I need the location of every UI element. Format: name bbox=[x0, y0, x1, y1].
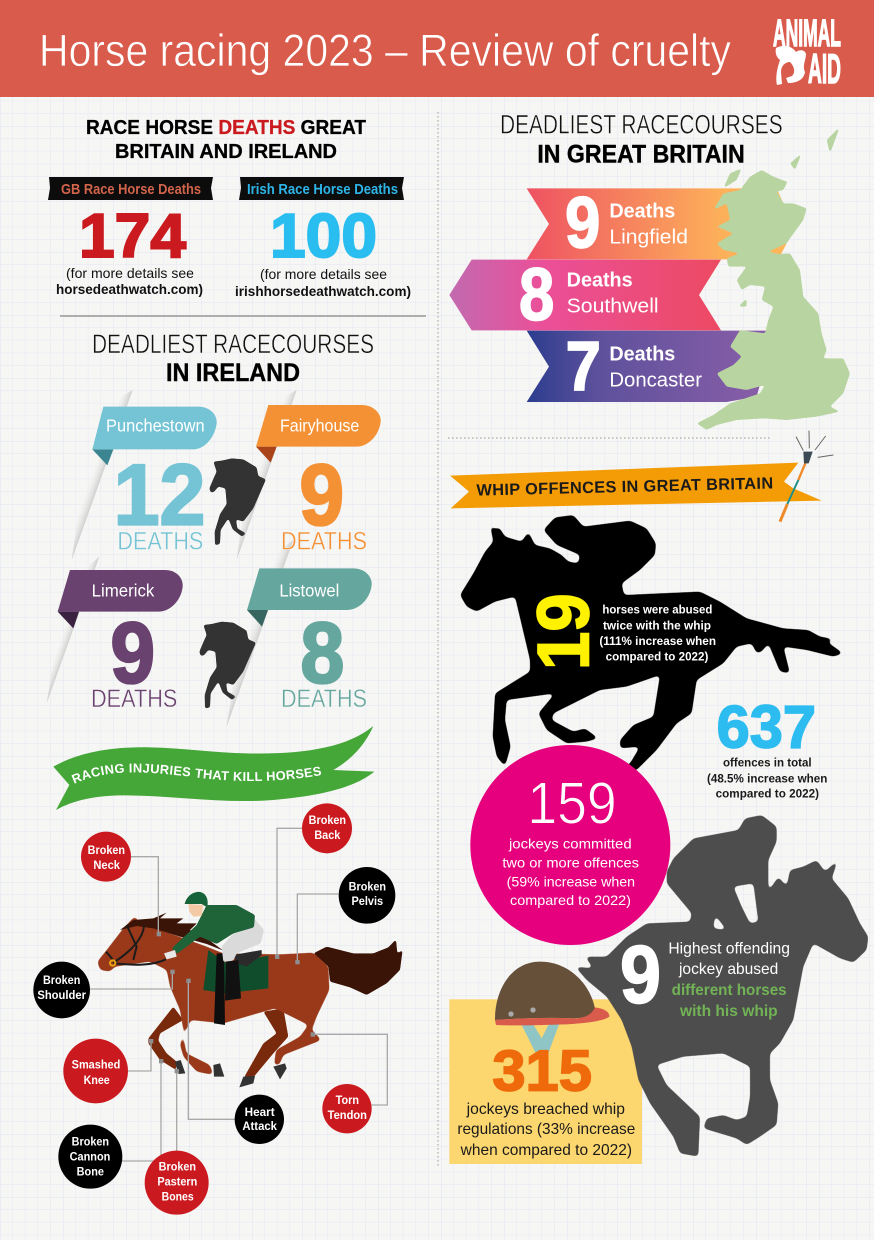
badge: heart attack: Heart bbox=[245, 1105, 275, 1119]
heading: Great Britain bbox=[500, 109, 783, 168]
text: horses abused: (111% increase when bbox=[599, 634, 716, 648]
badge: broken neck: Neck bbox=[93, 858, 120, 872]
horizontal dotted divider bbox=[448, 437, 770, 439]
text: horses abused: twice with the whip bbox=[603, 618, 711, 632]
panel: racing injuries diagram bbox=[33, 803, 403, 1215]
circle: 159 jockeys: (59% increase when bbox=[507, 874, 635, 890]
ribbon: Fairyhouse bbox=[256, 405, 381, 463]
panel: whip offences bbox=[450, 431, 843, 800]
ribbon: Lingfield bbox=[527, 184, 787, 264]
text: horses abused bbox=[599, 602, 716, 664]
stat: Fairyhouse 9 deaths: 9 bbox=[299, 447, 344, 543]
Irish deaths label: Irish Race Horse Deaths bbox=[247, 181, 398, 198]
badge: broken pelvis: Broken bbox=[349, 880, 386, 894]
heading: race horse deaths: RACE HORSE DEATHS GREAT bbox=[86, 117, 366, 139]
banner: whip offences: WHIP OFFENCES IN GREAT BRITAIN bbox=[476, 474, 773, 500]
text: highest offending jockey: with his whip bbox=[679, 1003, 778, 1020]
circle: 159 jockeys: jockeys committed bbox=[508, 835, 632, 851]
text: offences in total: offences in total bbox=[723, 756, 812, 770]
stat: Fairyhouse 9 deaths: DEATHS bbox=[281, 527, 367, 555]
section divider bbox=[60, 315, 426, 317]
panel: jockey offences bbox=[449, 745, 868, 1164]
glove bbox=[164, 950, 177, 959]
ribbon: Southwell bbox=[449, 253, 721, 336]
stat: 637 offences: 637 bbox=[717, 693, 816, 761]
stat: Limerick 9 deaths: 9 bbox=[110, 606, 155, 702]
ribbon: Limerick: Limerick bbox=[92, 581, 155, 601]
horse tail bbox=[313, 939, 403, 995]
badge: heart attack: Attack bbox=[242, 1119, 277, 1133]
badge: broken cannon bone bbox=[58, 1125, 122, 1189]
text: offences in total: (48.5% increase when bbox=[707, 772, 827, 786]
saddle bbox=[233, 950, 262, 967]
badge: broken pastern bones: Pastern bbox=[157, 1175, 197, 1189]
ribbon: Southwell: 8 bbox=[519, 253, 554, 336]
fold shadows bbox=[47, 390, 297, 727]
circle: 159 jockeys: 159 bbox=[527, 769, 617, 836]
text: jockeys breached whip regulations: when compared to 2022) bbox=[460, 1142, 632, 1159]
badge: torn tendon: Torn bbox=[336, 1093, 359, 1107]
silhouette: black horse and rider bbox=[460, 515, 843, 775]
panel: deadliest racecourses in Ireland bbox=[47, 329, 381, 727]
badge: broken back: Back bbox=[314, 828, 340, 842]
panel: deadliest racecourses in Great Britain bbox=[449, 109, 850, 430]
badge: broken shoulder: Broken bbox=[43, 973, 80, 987]
stat: 19 horses: 19 bbox=[523, 593, 604, 670]
stat: Limerick 9 deaths bbox=[91, 606, 177, 713]
badge: torn tendon bbox=[322, 1084, 372, 1133]
badge: smashed knee bbox=[63, 1039, 128, 1103]
stat: GB deaths 174: 174 bbox=[79, 202, 187, 271]
ribbon: Southwell: Deaths bbox=[567, 269, 633, 292]
badge: torn tendon: Tendon bbox=[328, 1108, 367, 1122]
stat: Listowel 8 deaths bbox=[281, 606, 367, 713]
mane bbox=[120, 913, 223, 951]
text: horses abused: horses were abused bbox=[602, 602, 712, 616]
ribbon: Lingfield: Lingfield bbox=[609, 225, 688, 248]
badge: broken cannon bone: Broken bbox=[72, 1135, 109, 1149]
stat: Fairyhouse 9 deaths bbox=[281, 447, 367, 555]
hooves bbox=[175, 1060, 287, 1087]
badge: smashed knee: Smashed bbox=[72, 1058, 120, 1072]
note: Irish details bbox=[235, 266, 411, 299]
text: highest offending jockey bbox=[668, 940, 790, 1020]
badge: broken pastern bones: Bones bbox=[162, 1190, 194, 1204]
badge: broken back: Broken bbox=[309, 813, 346, 827]
icon: riding helmet bbox=[495, 962, 609, 1055]
panel: race horse deaths bbox=[48, 117, 411, 299]
badge: broken pelvis: Pelvis bbox=[351, 894, 383, 908]
circle: 159 jockeys: compared to 2022) bbox=[510, 892, 631, 908]
map: Great Britain bbox=[697, 127, 850, 430]
ribbon: Doncaster bbox=[527, 327, 768, 405]
stat: Punchestown 12 deaths: 12 bbox=[114, 447, 205, 543]
text: highest offending jockey: Highest offending bbox=[668, 940, 790, 957]
ribbon: Limerick bbox=[58, 570, 183, 628]
badge: broken cannon bone: Bone bbox=[77, 1165, 104, 1179]
silhouette: grey horse and rider bbox=[575, 815, 868, 1157]
badge: smashed knee: Knee bbox=[84, 1073, 110, 1087]
stat: Limerick 9 deaths: DEATHS bbox=[91, 685, 177, 713]
badge: broken pastern bones: Broken bbox=[159, 1160, 196, 1174]
stat: Listowel 8 deaths: 8 bbox=[300, 606, 344, 702]
header band bbox=[0, 0, 874, 97]
ribbon: Doncaster: Doncaster bbox=[609, 369, 702, 392]
horse silhouette upper bbox=[209, 458, 266, 545]
circle: 159 jockeys bbox=[470, 745, 670, 945]
icon: whip bbox=[780, 431, 833, 522]
text: jockeys breached whip regulations: jockeys breached whip bbox=[466, 1101, 625, 1118]
badge: broken cannon bone: Cannon bbox=[70, 1150, 110, 1164]
note: Irish details: (for more details see bbox=[260, 266, 387, 282]
jockey face bbox=[188, 904, 203, 917]
jockey helmet bbox=[185, 892, 208, 907]
ribbon: Lingfield: 9 bbox=[565, 184, 600, 264]
ribbons: Irish racecourses bbox=[47, 390, 381, 727]
heading: Ireland: IN IRELAND bbox=[166, 359, 300, 387]
GB deaths label bbox=[48, 177, 213, 200]
heading: race horse deaths bbox=[86, 117, 366, 163]
title: Horse racing 2023 – Review of cruelty bbox=[39, 25, 731, 76]
vertical dotted divider bbox=[437, 112, 439, 1166]
banner: racing injuries bbox=[53, 726, 374, 810]
GB deaths label: GB Race Horse Deaths bbox=[61, 181, 201, 198]
girth bbox=[214, 953, 225, 1025]
ribbon: Punchestown bbox=[92, 407, 217, 465]
banner: whip offences bbox=[450, 463, 822, 508]
far legs bbox=[148, 1007, 288, 1077]
heading: Great Britain: DEADLIEST RACECOURSES bbox=[500, 109, 783, 139]
note: Irish details: irishhorsedeathwatch.com) bbox=[235, 283, 411, 299]
text: jockeys breached whip regulations bbox=[457, 1101, 636, 1159]
stat: 9 different horses: 9 bbox=[620, 930, 661, 1021]
connector end points bbox=[149, 932, 315, 1073]
note: GB details: (for more details see bbox=[66, 265, 194, 281]
heading: Great Britain: IN GREAT BRITAIN bbox=[537, 140, 745, 168]
banner: racing injuries: RACING INJURIES THAT KILL HORSES bbox=[72, 764, 322, 784]
horse silhouette lower bbox=[199, 622, 256, 709]
ribbon: Fairyhouse: Fairyhouse bbox=[280, 416, 359, 436]
badge: broken neck: Broken bbox=[88, 843, 125, 857]
badge: broken pelvis bbox=[339, 867, 395, 924]
stat: Listowel 8 deaths: DEATHS bbox=[281, 685, 367, 713]
jockey boot bbox=[225, 960, 241, 1001]
text: offences in total: compared to 2022) bbox=[716, 786, 819, 800]
stat: Punchestown 12 deaths: DEATHS bbox=[117, 527, 203, 555]
badge: broken shoulder: Shoulder bbox=[37, 988, 86, 1002]
ribbon: Lingfield: Deaths bbox=[609, 200, 675, 223]
heading: Ireland: DEADLIEST RACECOURSES bbox=[92, 329, 374, 359]
horse body and near legs bbox=[97, 916, 329, 1075]
text: horses abused: compared to 2022) bbox=[606, 650, 708, 664]
stat: Irish deaths 100: 100 bbox=[270, 202, 377, 271]
Irish deaths label bbox=[239, 177, 404, 200]
jockey legs bbox=[222, 918, 264, 962]
bridle bbox=[106, 925, 166, 965]
ribbon: Listowel: Listowel bbox=[279, 581, 339, 601]
note: GB details: horsedeathwatch.com) bbox=[56, 281, 203, 297]
ribbon: Southwell: Southwell bbox=[567, 295, 659, 318]
circle: 159 jockeys: two or more offences bbox=[502, 855, 639, 871]
heading: race horse deaths: BRITAIN AND IRELAND bbox=[115, 141, 337, 163]
ribbon: Listowel bbox=[247, 568, 372, 627]
note: GB details bbox=[56, 265, 203, 297]
text: jockeys breached whip regulations: regulations (33% increase bbox=[457, 1121, 636, 1138]
ribbon: Doncaster: 7 bbox=[566, 327, 601, 405]
yellow box bbox=[449, 999, 642, 1164]
heading: Ireland bbox=[92, 329, 374, 387]
logo: Animal Aid bbox=[773, 13, 841, 92]
text: offences in total bbox=[707, 756, 827, 800]
connector lines bbox=[90, 828, 387, 1161]
ribbon: Doncaster: Deaths bbox=[609, 343, 675, 366]
saddle cloth bbox=[203, 950, 268, 993]
badge: broken shoulder bbox=[33, 962, 90, 1018]
badge: broken neck bbox=[81, 832, 131, 882]
badge: broken back bbox=[302, 803, 352, 853]
badge: broken pastern bones bbox=[145, 1151, 209, 1215]
jockey jacket bbox=[172, 905, 255, 954]
badge: heart attack bbox=[235, 1095, 284, 1144]
text: highest offending jockey: jockey abused bbox=[678, 961, 778, 978]
ribbon: Punchestown: Punchestown bbox=[106, 416, 205, 436]
text: highest offending jockey: different horses bbox=[672, 982, 787, 999]
stat: 315 jockeys: 315 bbox=[492, 1039, 592, 1103]
horse and jockey illustration bbox=[97, 892, 403, 1087]
